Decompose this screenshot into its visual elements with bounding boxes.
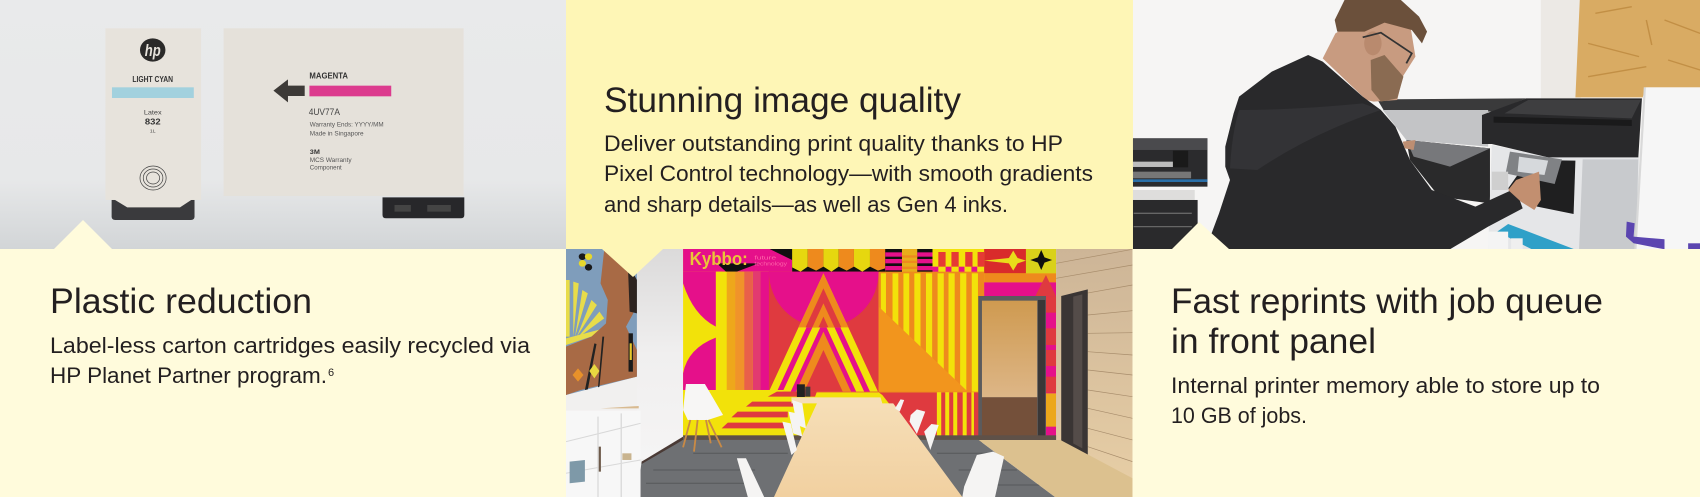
body: stunning image quality: Pixel Control technology—with smooth gradients [604, 161, 1093, 186]
shelf [566, 406, 641, 497]
panel: plastic reduction [0, 0, 566, 497]
text background: fast reprints [1133, 222, 1700, 497]
chair by wall [683, 384, 723, 452]
wood wall with dark door [1056, 249, 1132, 497]
body: fast reprints: 10 GB of jobs. [1171, 403, 1307, 428]
cutter machine [1133, 138, 1207, 249]
cartridge: magenta: 3M [310, 149, 320, 156]
cartridge: light cyan: 832 [145, 117, 161, 126]
cartridge: light cyan: hp [145, 41, 161, 60]
body: plastic reduction: HP Planet Partner program. [50, 363, 327, 388]
table chairs [737, 399, 1004, 497]
doorway [978, 296, 1046, 443]
mural: geometric wall print: technology [754, 262, 787, 268]
text background: plastic reduction [0, 220, 566, 497]
conference table [774, 384, 962, 497]
triangle motif: nested chevrons [769, 273, 878, 392]
cartridge: light cyan [105, 28, 201, 220]
panel: fast reprints [1132, 0, 1700, 428]
photo: man using printer front panel [1133, 0, 1700, 249]
cartridge: magenta: Warranty Ends: YYYY/MM [310, 122, 384, 129]
paper roll [1626, 87, 1700, 249]
heading: fast reprints with job queue in front panel [1171, 282, 1603, 361]
pointer: notch down into photo [602, 249, 663, 277]
heading: plastic reduction: Plastic reduction [50, 282, 312, 321]
photo: cartridges on gray background [0, 0, 566, 249]
printer behind [1378, 98, 1526, 203]
body: stunning image quality [604, 131, 1093, 217]
cartridge: light cyan: LIGHT CYAN [132, 74, 173, 84]
cartridge: magenta: Component [310, 165, 342, 171]
body: plastic reduction: Label-less carton cartridges easily recycled via [50, 333, 530, 358]
large format printer [1482, 98, 1642, 249]
photo: conference room with printed mural [566, 249, 1132, 497]
cartridge: magenta: Made in Singapore [310, 131, 364, 137]
poster: woman with fan [566, 249, 637, 395]
cartridge: magenta [224, 28, 464, 218]
body: stunning image quality: Deliver outstanding print quality thanks to HP [604, 131, 1063, 156]
cartridge: magenta: MAGENTA [309, 71, 348, 81]
heading: stunning image quality: Stunning image quality [604, 81, 961, 120]
mural: geometric wall print: Kybbo: [690, 249, 748, 270]
heading: fast reprints with job queue in front panel: in front panel [1171, 322, 1376, 361]
mural: geometric wall print [683, 249, 1056, 437]
text background: stunning image quality [566, 0, 1133, 249]
cartridge: magenta: 4UV77A [309, 107, 340, 118]
mural: geometric wall print: future [754, 256, 777, 261]
body: fast reprints: Internal printer memory able to store up to [1171, 373, 1600, 398]
body: stunning image quality: and sharp details—as well as Gen 4 inks. [604, 192, 1008, 217]
body: plastic reduction: 6 [328, 367, 334, 379]
floor: carpet and polished concrete [637, 435, 1132, 497]
wall and osb board [1541, 0, 1700, 98]
cartridge: light cyan: Latex [144, 110, 162, 117]
body: fast reprints [1171, 373, 1600, 428]
panel: stunning image quality [566, 0, 1133, 497]
cartridge: magenta: MCS Warranty [310, 157, 352, 164]
heading: fast reprints with job queue in front panel: Fast reprints with job queue [1171, 282, 1603, 321]
man in black hoodie [1206, 0, 1541, 249]
body: plastic reduction [50, 333, 530, 388]
cartridge: light cyan: 1L [150, 129, 156, 135]
